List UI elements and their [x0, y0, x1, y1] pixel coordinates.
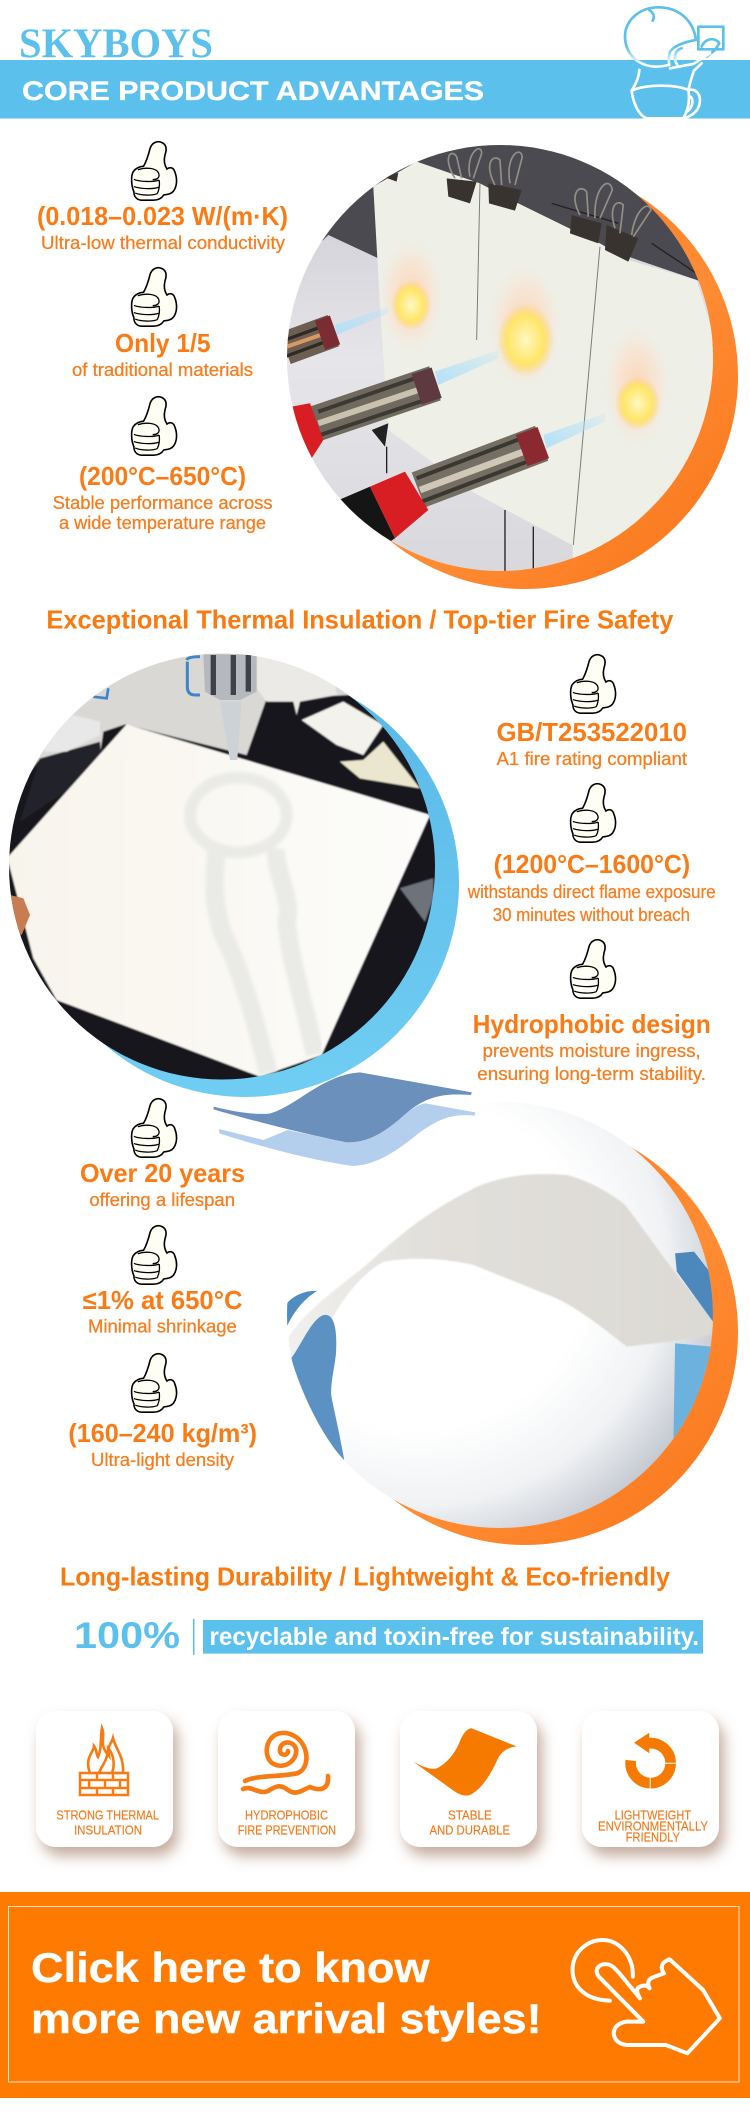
value: lifespan: Over 20 years: [80, 1158, 245, 1188]
callout: 100 percent recyclable: [74, 1615, 703, 1656]
section heading: durability and eco-friendly: Long-lasting Durability / Lightweight & Eco-friendly: [60, 1562, 671, 1592]
caption: INSULATION: [74, 1824, 142, 1838]
value: only 1/5: Only 1/5: [115, 328, 210, 358]
decorative orange disc behind sheet photo: [312, 1119, 738, 1545]
photo: torches on insulation panels: [287, 145, 713, 571]
feature group: fire safety: [467, 655, 716, 1084]
description: moisture: prevents moisture ingress,: [483, 1041, 701, 1061]
value: flame temperature: (1200°C–1600°C): [494, 849, 690, 879]
description: fire rating: A1 fire rating compliant: [496, 749, 687, 769]
description: stable performance: Stable performance across: [53, 493, 273, 513]
description: duration: 30 minutes without breach: [493, 905, 690, 925]
decorative orange disc behind torch photo: [312, 163, 738, 589]
description: temperature range: a wide temperature range: [59, 513, 266, 533]
caption: LIGHTWEIGHT: [615, 1808, 691, 1822]
icon: thumbs up: [132, 268, 177, 326]
description: density: Ultra-light density: [91, 1450, 234, 1470]
icon: baby figure with tablet: [625, 7, 723, 118]
photo: water beading on hydrophobic sheet: [9, 654, 435, 1080]
card: lightweight environmentally friendly: [582, 1711, 719, 1847]
logo: SKYBOYS: SKYBOYS: [19, 22, 213, 68]
value: density: (160–240 kg/m³): [68, 1418, 257, 1448]
caption: STRONG THERMAL: [56, 1808, 159, 1822]
icon: thumbs up: [571, 655, 616, 713]
card: stable and durable: [400, 1711, 537, 1847]
value: fire standard: GB/T253522010: [496, 717, 687, 747]
heading: core product advantages: CORE PRODUCT ADVANTAGES: [22, 76, 484, 106]
call to action banner: [0, 1892, 750, 2098]
value: temperature range: (200°C–650°C): [79, 461, 246, 491]
card: hydrophobic fire prevention: [218, 1711, 355, 1847]
header band: [0, 60, 750, 118]
icon: thumbs up: [132, 1099, 177, 1157]
icon: thumbs up: [132, 397, 177, 455]
icon: thumbs up: [571, 784, 616, 842]
description: thermal conductivity: Ultra-low thermal conductivity: [41, 233, 285, 253]
value: thermal conductivity: (0.018–0.023 W/(m·K): [37, 201, 288, 231]
feature group: durability and weight: [68, 1099, 257, 1470]
label bar: [203, 1620, 703, 1654]
icon: thumbs up: [132, 142, 177, 200]
icon: recycle arrow: [631, 1733, 677, 1790]
caption: FRIENDLY: [626, 1830, 681, 1844]
value: shrinkage: ≤1% at 650°C: [83, 1285, 243, 1315]
value: hydrophobic design: Hydrophobic design: [473, 1009, 711, 1039]
icon: flame and brick wall: [80, 1728, 128, 1795]
icon: tapping hand: [573, 1940, 720, 2053]
caption: STABLE: [448, 1808, 492, 1822]
section heading: thermal insulation and fire safety: Exceptional Thermal Insulation / Top-tier Fire Safety: [46, 604, 674, 634]
description: traditional materials: of traditional materials: [72, 360, 253, 380]
description: stability: ensuring long-term stability.: [477, 1064, 706, 1084]
illustration: layered blue sheets: [214, 1072, 475, 1166]
icon: thumbs up: [132, 1226, 177, 1284]
call to action text line 2: more new arrival styles!: [31, 1995, 542, 2042]
icon: thumbs up: [571, 940, 616, 998]
description: flame exposure: withstands direct flame exposure: [467, 882, 716, 902]
stat: 100%: 100%: [74, 1615, 180, 1656]
icon: thumbs up: [132, 1354, 177, 1412]
label text: recyclable and toxin-free for sustainability.: [210, 1623, 699, 1651]
icon: spiral roll: [243, 1733, 328, 1793]
description: shrinkage: Minimal shrinkage: [88, 1316, 237, 1336]
photo: flexible sheet held by gloved hands: [287, 1111, 713, 1528]
caption: HYDROPHOBIC: [245, 1808, 328, 1822]
card: strong thermal insulation: [36, 1711, 173, 1847]
caption: FIRE PREVENTION: [238, 1824, 336, 1838]
decorative blue disc behind water photo: [31, 669, 459, 1097]
caption: ENVIRONMENTALLY: [598, 1820, 709, 1834]
call to action text line 1: Click here to know: [31, 1944, 430, 1991]
description: lifespan: offering a lifespan: [89, 1190, 235, 1210]
feature group: thermal performance: [37, 142, 288, 533]
caption: AND DURABLE: [430, 1824, 510, 1838]
icon: curved sheet: [413, 1728, 517, 1796]
